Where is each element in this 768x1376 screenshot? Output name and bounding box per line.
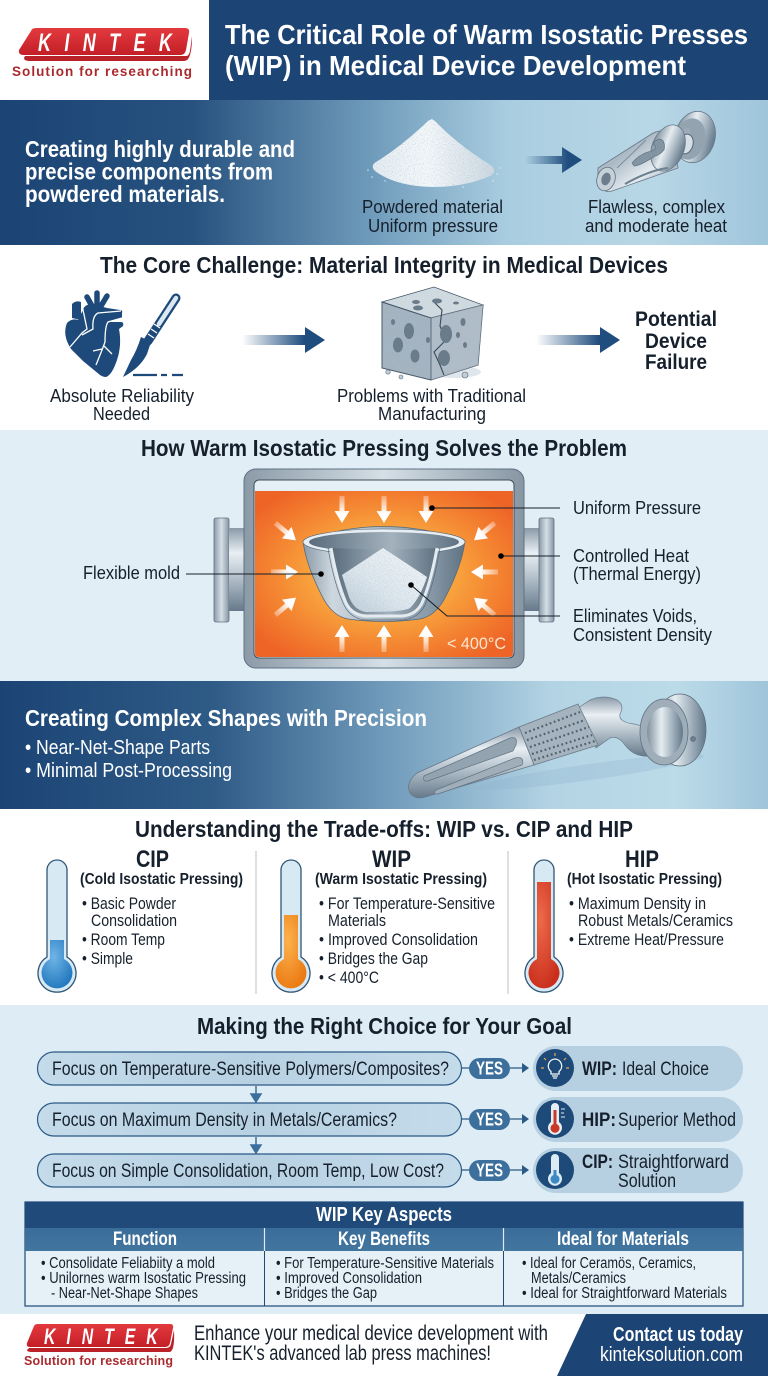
HIP text: • Extreme Heat/Pressure (569, 930, 724, 949)
column: key benefits (276, 1255, 494, 1302)
decision 3: CIP: (582, 1152, 613, 1173)
caption: part: Flawless, complex (588, 197, 725, 217)
callout labels: Uniform Pressure (573, 498, 701, 518)
decision 3: Focus on Simple Consolidation, Room Temp, Low Cost? (52, 1161, 444, 1182)
table: WIP key aspects (25, 1202, 743, 1306)
WIP text (315, 846, 495, 987)
icon: heart and scalpel (65, 293, 183, 377)
title: (WIP) in Medical Device Development (225, 50, 686, 81)
logo: KINTEK: Solution for researching (12, 64, 192, 79)
temperature label: < 400°C (447, 634, 506, 653)
thermometer: WIP (272, 860, 310, 992)
CIP text: (Cold Isostatic Pressing) (80, 871, 243, 888)
WIP text: • Bridges the Gap (319, 949, 428, 968)
decision 3: Solution (618, 1171, 676, 1192)
panel: footer (0, 1314, 768, 1376)
footer message: Enhance your medical device development with (194, 1322, 548, 1345)
CIP text: Consolidation (91, 911, 177, 930)
decision 3: YES (476, 1160, 503, 1180)
decision 1: Focus on Temperature-Sensitive Polymers/Composites? (52, 1059, 449, 1080)
WIP text: (Warm Isostatic Pressing) (315, 871, 487, 888)
banner text (25, 705, 427, 782)
HIP text: (Hot Isostatic Pressing) (567, 871, 722, 888)
callout labels: (Thermal Energy) (573, 564, 701, 584)
icon: porous cracked block (382, 287, 483, 380)
column: ideal materials (522, 1255, 727, 1302)
hero statement: Creating highly durable and (25, 136, 295, 162)
callout labels (83, 498, 712, 645)
column headers: Ideal for Materials (557, 1229, 689, 1250)
HIP text (567, 846, 733, 949)
caption: reliability: Needed (93, 404, 150, 424)
callout labels: Eliminates Voids, (573, 606, 697, 626)
caption: powder: Powdered material (362, 197, 503, 217)
caption: traditional manufacturing (337, 386, 526, 424)
decision 2 (38, 1097, 743, 1142)
column headers: Function (113, 1229, 177, 1250)
decision 2: HIP: (582, 1110, 616, 1131)
arrow (242, 327, 325, 353)
CIP text: • Room Temp (82, 930, 165, 949)
column: function: - Near-Net-Shape Shapes (51, 1285, 198, 1302)
decision 3 (38, 1148, 743, 1193)
heading: Understanding the Trade-offs: WIP vs. CIP and HIP (135, 816, 633, 842)
logo: KINTEK: KINTEK (38, 28, 174, 57)
footer logo (24, 1324, 174, 1368)
caption: reliability: Absolute Reliability (50, 386, 194, 406)
decision 1 (38, 1046, 743, 1091)
caption: powder: Uniform pressure (368, 216, 498, 236)
heading: How Warm Isostatic Pressing Solves the Problem (141, 435, 627, 461)
logo: KINTEK (0, 0, 209, 100)
HIP text: • Maximum Density in (569, 894, 706, 913)
icon: implant (409, 694, 706, 798)
caption: powder (362, 197, 503, 236)
panel: trade-offs (0, 809, 768, 1005)
decision 2: Focus on Maximum Density in Metals/Ceramics? (52, 1110, 397, 1131)
outcome: potential device failure (635, 308, 717, 374)
HIP text: HIP (625, 846, 659, 873)
column headers: Key Benefits (338, 1229, 430, 1250)
decision 2: Superior Method (618, 1110, 736, 1131)
hero statement: precise components from (25, 158, 273, 184)
column: function: • Consolidate Feliabiity a mold (41, 1255, 215, 1272)
footer message: KINTEK's advanced lab press machines! (194, 1342, 491, 1365)
outcome: potential device failure: Device (645, 330, 707, 353)
decision 2: YES (476, 1110, 503, 1130)
callout labels: Flexible mold (83, 563, 180, 583)
icon: powder pile (367, 119, 501, 188)
thermometer: CIP (38, 860, 76, 992)
heading: The Core Challenge: Material Integrity in Medical Devices (100, 252, 668, 278)
footer logo: KINTEK (44, 1326, 159, 1350)
footer logo: Solution for researching (24, 1354, 173, 1368)
panel: complex shapes banner (0, 681, 768, 809)
column: function (41, 1255, 246, 1302)
arrow (536, 327, 620, 353)
panel: core challenge (0, 245, 768, 430)
arrow (251, 1086, 261, 1102)
column: WIP (272, 846, 495, 992)
callout labels: Controlled Heat (573, 546, 689, 566)
WIP text: • Improved Consolidation (319, 930, 478, 949)
banner text: Creating Complex Shapes with Precision (25, 705, 427, 731)
thermometer: HIP (525, 860, 563, 992)
callout labels: Consistent Density (573, 625, 712, 645)
arrow (251, 1137, 261, 1153)
flexible mold with powder (303, 526, 465, 622)
diagram: pressure vessel (214, 469, 554, 668)
panel: making the right choice (0, 1005, 768, 1314)
contact block (557, 1314, 768, 1376)
heading: Making the Right Choice for Your Goal (197, 1013, 572, 1039)
caption: part (585, 197, 727, 236)
header band (0, 0, 768, 100)
column: key benefits: • Bridges the Gap (276, 1285, 377, 1302)
caption: traditional manufacturing: Manufacturing (378, 404, 486, 424)
title (225, 19, 748, 81)
decision 3: Straightforward (618, 1152, 729, 1173)
decision 1: YES (476, 1058, 503, 1078)
panel: hero (0, 100, 768, 245)
column: key benefits: • Improved Consolidation (276, 1270, 422, 1287)
column: CIP (38, 846, 243, 992)
column: ideal materials: • Ideal for Ceramös, Ceramics, (522, 1255, 696, 1272)
table title: WIP Key Aspects (316, 1204, 452, 1226)
WIP text: • For Temperature-Sensitive (319, 894, 495, 913)
column: key benefits: • For Temperature-Sensitive Materials (276, 1255, 494, 1272)
CIP text: • Basic Powder (82, 894, 176, 913)
banner text: • Minimal Post-Processing (25, 760, 232, 782)
hero statement: powdered materials. (25, 181, 225, 207)
CIP text (80, 846, 243, 968)
caption: reliability (50, 386, 194, 424)
HIP text: Robust Metals/Ceramics (578, 911, 733, 930)
panel: how WIP solves the problem (0, 430, 768, 681)
column: ideal materials: Metals/Ceramics (531, 1270, 626, 1287)
callout lines (186, 505, 560, 616)
column: ideal materials: • Ideal for Straightforward Materials (522, 1285, 727, 1302)
hero statement (25, 136, 295, 207)
outcome: potential device failure: Failure (645, 351, 707, 374)
WIP text: Materials (328, 911, 386, 930)
CIP text: CIP (136, 846, 169, 873)
outcome: potential device failure: Potential (635, 308, 717, 331)
decision 1: WIP: (582, 1059, 617, 1080)
banner text: • Near-Net-Shape Parts (25, 737, 210, 759)
caption: part: and moderate heat (585, 216, 727, 236)
footer message (194, 1322, 548, 1365)
pressure arrows (270, 496, 500, 652)
column: HIP (525, 846, 733, 992)
WIP text: • < 400°C (319, 968, 379, 987)
icon: flawless part (594, 107, 721, 193)
column headers (113, 1229, 689, 1250)
caption: traditional manufacturing: Problems with Traditional (337, 386, 526, 406)
CIP text: • Simple (82, 949, 133, 968)
WIP text: WIP (372, 846, 411, 873)
decision 1: Ideal Choice (622, 1059, 709, 1080)
column: function: • Unilornes warm Isostatic Pressing (41, 1270, 246, 1287)
arrow: powder to part (525, 147, 582, 173)
contact block: kinteksolution.com (600, 1344, 743, 1366)
